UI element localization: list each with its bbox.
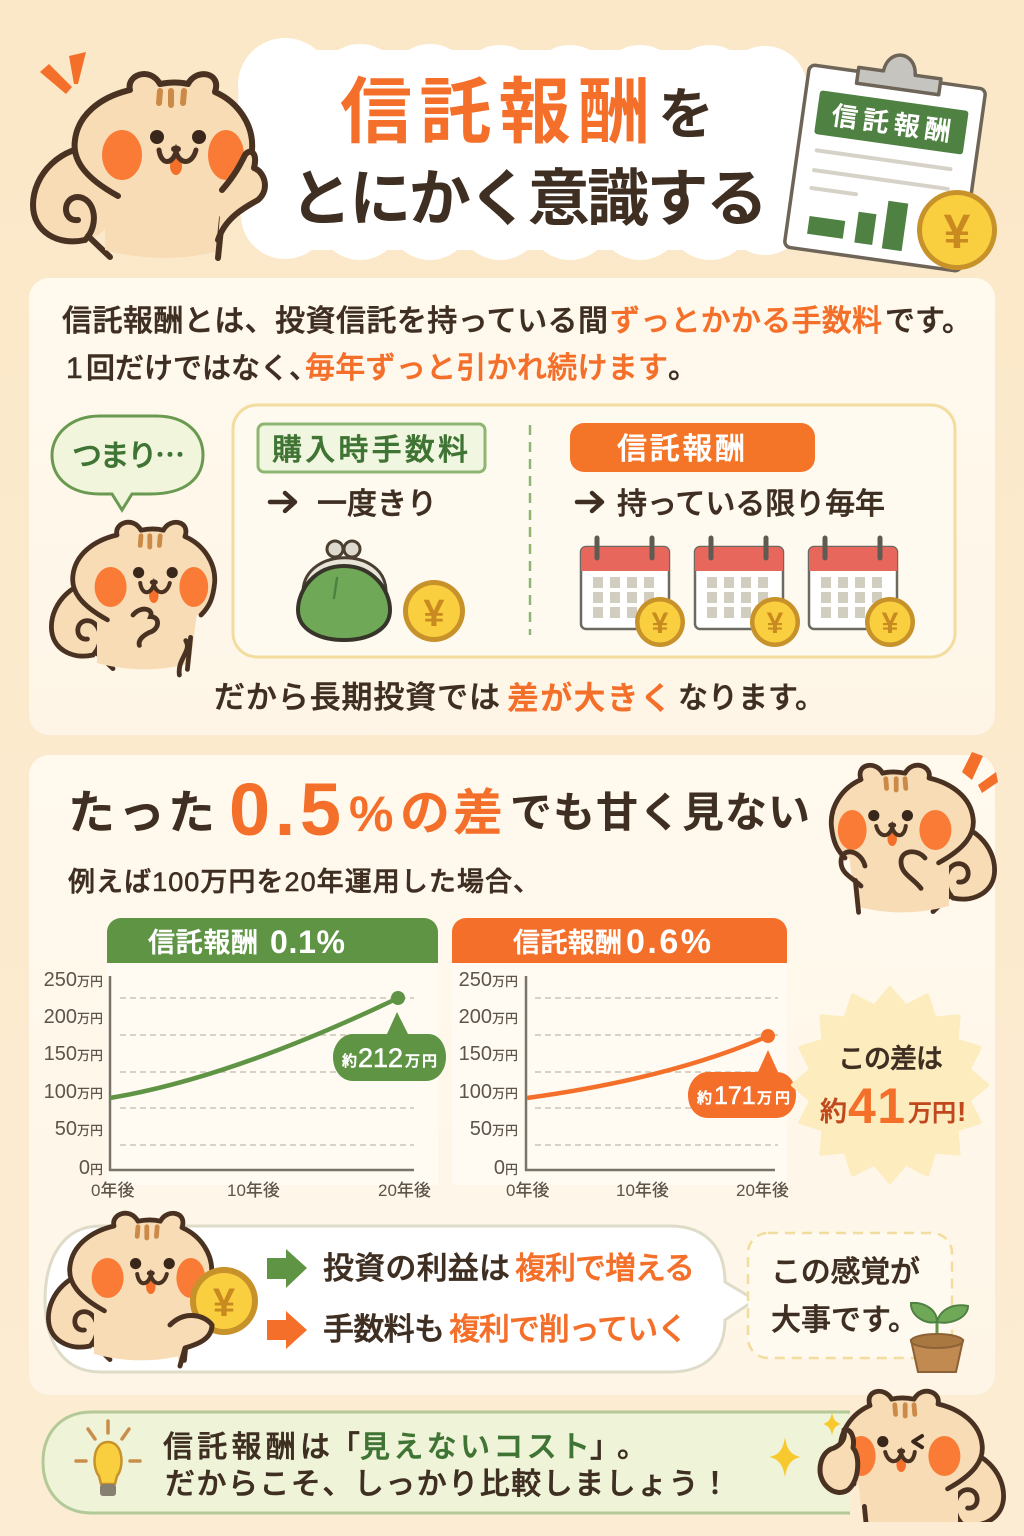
conclusion text: 差が大きく xyxy=(507,680,672,716)
mascot: squirrel with coin: ¥ xyxy=(213,1281,236,1325)
heading: 0.5 xyxy=(229,768,341,851)
label: trust fee xyxy=(570,423,815,472)
arrow: green xyxy=(267,1249,307,1288)
y axis labels: 0円 xyxy=(494,1157,518,1179)
conclusion text xyxy=(214,680,825,716)
dashed note: 大事です。 xyxy=(771,1304,918,1337)
chart: 0.6% xyxy=(452,918,796,1200)
title: 信託報酬 xyxy=(340,73,650,153)
intro text: 回だけではなく、 xyxy=(86,353,318,385)
intro text: 。 xyxy=(668,352,698,385)
starburst: difference: この差は xyxy=(838,1044,943,1074)
y axis labels: 50万円 xyxy=(470,1118,518,1140)
title cloud xyxy=(238,38,807,260)
label: purchase fee: 購入時手数料 xyxy=(272,434,468,467)
icon: calendar 1: ¥ xyxy=(652,607,669,640)
text: profit compounds xyxy=(323,1251,695,1286)
callout: 212 xyxy=(333,1012,446,1081)
starburst: difference: 約 xyxy=(820,1097,847,1127)
closing text: 「 xyxy=(330,1431,360,1464)
y axis labels: 150万円 xyxy=(459,1043,518,1065)
icon: calendar 3: ¥ xyxy=(882,607,899,640)
icon: calendar 3 xyxy=(809,538,915,647)
icon: calendar 1 xyxy=(581,538,685,647)
icon: clipboard: ¥ xyxy=(944,206,971,259)
text: fees compound: 手数料も xyxy=(323,1312,445,1347)
mascot: squirrel with coin xyxy=(48,1213,258,1366)
intro text: です。 xyxy=(885,305,972,338)
label: purchase fee xyxy=(258,424,485,472)
x axis labels: 20年後 xyxy=(736,1181,789,1200)
intro text: 1 xyxy=(66,352,83,385)
starburst: difference: 41 xyxy=(848,1078,905,1134)
callout: 212: 約 xyxy=(342,1053,357,1070)
y axis labels: 200万円 xyxy=(44,1006,103,1028)
speech bubble: tsumari: つまり… xyxy=(72,431,185,475)
y axis labels: 250万円 xyxy=(459,969,518,991)
example text: 例えば100万円を20年運用した場合、 xyxy=(68,867,540,897)
mascot: title squirrel xyxy=(33,52,265,258)
intro text: ずっとかかる手数料 xyxy=(610,305,882,338)
heading: % xyxy=(349,786,393,842)
icon: sparkles xyxy=(769,1412,841,1477)
heading: の差 xyxy=(400,785,503,841)
x axis labels: 10年後 xyxy=(227,1181,280,1200)
callout: 171: 171 xyxy=(714,1082,756,1110)
closing text: 。 xyxy=(617,1431,647,1464)
chart header: 0.6% xyxy=(626,923,711,961)
title: を xyxy=(658,83,714,146)
y axis labels: 250万円 xyxy=(44,969,103,991)
y axis labels: 100万円 xyxy=(44,1081,103,1103)
icon: clipboard: 信託報酬 xyxy=(830,100,953,147)
closing text: だからこそ、しっかり比較しましょう！ xyxy=(165,1468,730,1501)
panel: what is the trust fee xyxy=(29,278,995,735)
icon: yen coin: ¥ xyxy=(423,593,445,635)
text: profit compounds: 複利で増える xyxy=(515,1251,695,1286)
speech bubble: compound interest xyxy=(45,1226,755,1372)
x axis labels: 0年後 xyxy=(506,1181,549,1200)
closing text: 見えないコスト xyxy=(360,1431,590,1464)
starburst: difference: ! xyxy=(957,1096,966,1127)
x axis labels: 10年後 xyxy=(616,1181,669,1200)
chart header: 信託報酬 xyxy=(148,928,258,958)
callout: 171: 万円 xyxy=(757,1090,790,1107)
icon: coin purse xyxy=(298,541,390,640)
icon: yen coin xyxy=(403,580,465,642)
text: fees compound: 複利で削っていく xyxy=(449,1312,688,1347)
callout: 212: 万円 xyxy=(405,1053,437,1070)
chart header xyxy=(452,918,787,963)
text: fees compound xyxy=(323,1312,688,1347)
y axis labels: 100万円 xyxy=(459,1081,518,1103)
y axis labels xyxy=(459,969,518,1179)
y axis labels: 50万円 xyxy=(55,1118,103,1140)
heading: たった xyxy=(68,786,215,839)
starburst: difference: 万円 xyxy=(908,1100,956,1127)
icon: calendar 2: ¥ xyxy=(767,607,784,640)
callout: 171 xyxy=(688,1050,796,1118)
y axis labels: 150万円 xyxy=(44,1043,103,1065)
x axis labels xyxy=(91,1181,431,1200)
intro text: 毎年ずっと引かれ続けます xyxy=(305,352,668,385)
comparison box xyxy=(233,405,955,657)
icon: light bulb xyxy=(76,1421,140,1496)
conclusion text: だから長期投資では xyxy=(214,680,500,715)
mascot: thinking squirrel xyxy=(51,522,215,675)
chart header: 0.1% xyxy=(270,924,345,960)
y axis labels: 200万円 xyxy=(459,1006,518,1028)
x axis labels xyxy=(506,1181,789,1200)
dashed note xyxy=(748,1233,952,1358)
mascot: cheering squirrel xyxy=(831,752,998,912)
closing text xyxy=(163,1431,730,1501)
conclusion text: なります。 xyxy=(678,682,825,715)
label: trust fee: 信託報酬 xyxy=(617,433,745,466)
chart header xyxy=(107,918,438,963)
icon: clipboard xyxy=(784,43,997,271)
callout: 171: 約 xyxy=(697,1090,712,1107)
intro text xyxy=(62,305,972,385)
title xyxy=(290,73,768,234)
line xyxy=(110,991,405,1098)
intro text: 信託報酬とは、投資信託を持っている間 xyxy=(62,305,608,338)
icon: sprout xyxy=(911,1303,968,1372)
y axis labels xyxy=(44,969,103,1179)
heading xyxy=(68,768,810,851)
y axis labels: 0円 xyxy=(79,1157,103,1179)
arrow: orange xyxy=(267,1311,307,1349)
speech bubble: tsumari xyxy=(52,416,203,510)
line xyxy=(527,1029,775,1098)
chart header: 信託報酬 xyxy=(513,928,622,958)
every year: 持っている限り毎年 xyxy=(617,488,885,521)
panel: 0.5% difference xyxy=(29,752,998,1395)
heading: でも甘く見ない xyxy=(510,789,810,836)
icon: calendar 2 xyxy=(695,538,800,647)
mascot: winking squirrel xyxy=(820,1391,1004,1536)
title: とにかく意識する xyxy=(290,165,768,234)
closing text: 」 xyxy=(590,1431,620,1464)
callout: 212: 212 xyxy=(358,1043,403,1073)
text: profit compounds: 投資の利益は xyxy=(323,1251,510,1286)
dashed note: この感覚が xyxy=(771,1256,920,1289)
x axis labels: 20年後 xyxy=(378,1181,431,1200)
bottom banner xyxy=(43,1391,1004,1536)
x axis labels: 0年後 xyxy=(91,1181,134,1200)
starburst: difference xyxy=(793,988,987,1182)
chart: 0.1% xyxy=(44,918,446,1200)
closing text: 信託報酬は xyxy=(163,1431,330,1464)
once only: 一度きり xyxy=(317,488,437,521)
